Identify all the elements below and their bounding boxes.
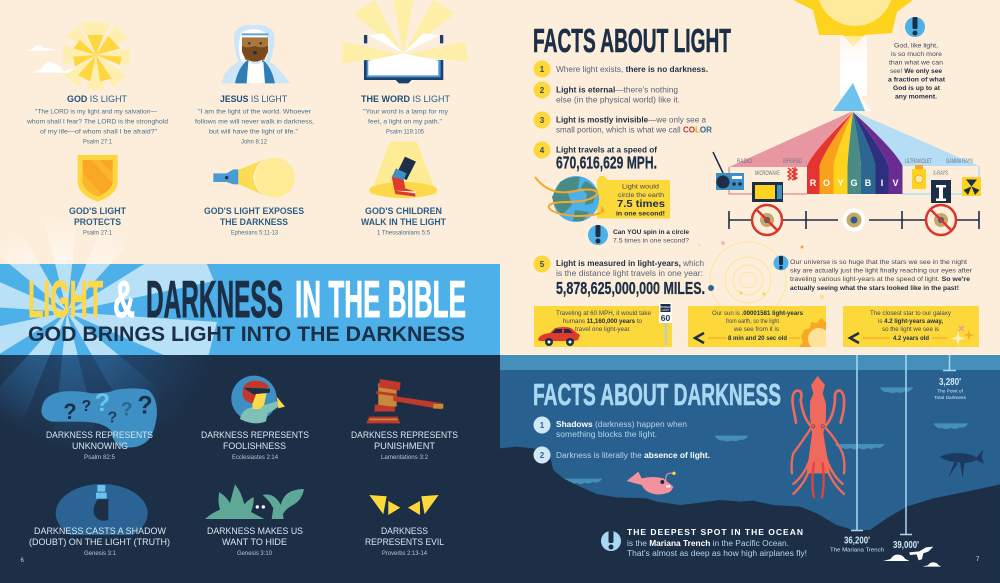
- callout: our sun: from earth, so the light: [726, 318, 779, 325]
- text: punishment: Lamentations 3:2: [381, 455, 429, 461]
- rainbow letters: B: [865, 178, 872, 188]
- icon: jesus: [222, 25, 290, 83]
- icon: car: [538, 327, 580, 346]
- callout: closest star: 4.2 years old: [893, 335, 929, 342]
- spectrum labels: RADIO: [737, 159, 752, 165]
- spectrum labels: X-RAYS: [933, 171, 948, 177]
- fact 3: Light is mostly invisible—we only see a: [556, 116, 707, 124]
- icon: radiation: [962, 177, 981, 196]
- icon: infrared waves: [788, 168, 797, 180]
- text: want to hide: DARKNESS MAKES US: [207, 526, 303, 537]
- chart: visibility ruler: [729, 205, 979, 235]
- rainbow letters: I: [881, 178, 883, 188]
- callout: our universe: traveling various light-years at the speed of light. So we're: [790, 276, 971, 283]
- text: punishment: PUNISHMENT: [374, 441, 435, 452]
- icon: blocked eye left: [752, 205, 782, 235]
- text: the word is light: Psalm 119:105: [386, 130, 425, 136]
- fact 2: [534, 82, 680, 104]
- callout: god like light: [888, 17, 946, 100]
- page number 6: 6: [20, 558, 24, 564]
- title: light and darkness in the bible: &: [113, 271, 135, 329]
- fact 5: 5,878,625,000,000 MILES.: [556, 278, 705, 298]
- callout: circle the earth: Light would: [622, 184, 660, 190]
- icon: speed limit sign: [659, 303, 672, 345]
- text: god is light: GOD IS LIGHT: [67, 94, 127, 105]
- text: god's light exposes the darkness: GOD'S LIGHT EXPOSES: [204, 205, 304, 216]
- chart: electromagnetic spectrum: [713, 83, 981, 203]
- rainbow letters: [810, 178, 899, 188]
- text: god's light exposes the darkness: Ephesians 5:11-13: [231, 230, 279, 236]
- text: god's light exposes the darkness: [204, 205, 304, 236]
- dark fact 1: Shadows (darkness) happen when: [556, 420, 687, 429]
- rainbow letters: O: [823, 178, 830, 188]
- label: 39,000 feet: 39,000': [893, 539, 919, 551]
- text: jesus is light: John 8:12: [241, 140, 268, 146]
- icon: question marks: ?: [107, 409, 117, 426]
- text: casts a shadow: DARKNESS CASTS A SHADOW: [34, 526, 166, 537]
- icon: airplane and clouds: [883, 547, 941, 567]
- callout: our universe: actually seeing what the stars looked like in the past!: [790, 285, 959, 292]
- text: unknowing: UNKNOWING: [72, 441, 128, 452]
- text: god is light: whom shall I fear? The LORD is the stronghold: [26, 118, 168, 126]
- text: god's light exposes the darkness: THE DARKNESS: [220, 216, 288, 227]
- text: the word is light: feet, a light on my path.": [368, 118, 443, 126]
- fact 5: 5: [540, 260, 545, 269]
- text: god's children walk in the light: 1 Thessalonians 5:5: [377, 230, 431, 236]
- text: unknowing: Psalm 82:5: [84, 455, 116, 461]
- blue title band: [0, 264, 500, 355]
- text: god's children walk in the light: GOD'S CHILDREN: [365, 205, 442, 216]
- icon: exclamation: [601, 531, 621, 551]
- callout: god like light: than what we can: [889, 60, 944, 66]
- rainbow letters: V: [892, 178, 899, 188]
- title: light and darkness in the bible: IN THE BIBLE: [295, 271, 466, 329]
- icon: universe rings: [698, 241, 824, 318]
- callout: god like light: God is up to at: [893, 85, 941, 92]
- text: represents evil: REPRESENTS EVIL: [365, 537, 444, 548]
- rainbow letters: Y: [837, 178, 844, 188]
- dark fact 2: Darkness is literally the absence of light.: [556, 451, 710, 460]
- spectrum labels: INFRARED: [783, 159, 802, 165]
- arrow lines: [708, 337, 800, 339]
- icon: sun: [799, 318, 826, 347]
- text: foolishness: Ecclesiastes 2:14: [232, 455, 279, 461]
- text: god's children walk in the light: [361, 205, 446, 236]
- fact 4: 4: [540, 146, 545, 155]
- icon: flashlight: [213, 158, 295, 198]
- fact 5: is the distance light travels in one year:: [556, 269, 703, 278]
- callout: god like light: see! We only see: [890, 68, 943, 75]
- icon: gavel: [366, 379, 443, 423]
- text: represents evil: Proverbs 2:13-14: [382, 551, 428, 557]
- callout: our sun: we see from it is: [733, 326, 779, 333]
- callout: can you spin: Can YOU spin in a circle: [613, 229, 689, 236]
- page number 7: 7: [976, 557, 980, 563]
- icon: question marks: ?: [137, 392, 153, 419]
- text: god's light protects: [69, 205, 126, 236]
- icon: blindfolded head: [231, 376, 285, 423]
- text: represents evil: [365, 526, 444, 557]
- icon: question marks: ?: [63, 399, 77, 424]
- text: foolishness: FOOLISHNESS: [223, 441, 286, 452]
- text: want to hide: WANT TO HIDE: [222, 537, 287, 548]
- fact 3: 3: [540, 116, 545, 125]
- spectrum labels: ULTRAVIOLET: [905, 159, 932, 165]
- callout: our sun: 8 min and 20 sec old: [728, 335, 787, 342]
- ocean floor: [500, 447, 1000, 583]
- icon: microwave: [752, 182, 783, 202]
- callout: closest star: is 4.2 light-years away,: [878, 318, 943, 325]
- icon: speed limit sign: LIMIT: [662, 308, 669, 312]
- dark fact 1: 1: [540, 421, 545, 430]
- text: god's children walk in the light: WALK IN THE LIGHT: [361, 216, 446, 227]
- text: want to hide: [207, 526, 303, 557]
- callout: closest star: [843, 306, 979, 347]
- fact 5: [534, 256, 705, 298]
- callout: deepest spot: is the Mariana Trench in the Pacific Ocean.: [627, 539, 789, 548]
- callout: our sun: [688, 306, 826, 347]
- text: punishment: DARKNESS REPRESENTS: [351, 430, 458, 441]
- text: god is light: Psalm 27:1: [83, 140, 113, 146]
- callout: our universe: Our universe is so huge that the stars we see in the night: [790, 259, 967, 266]
- dark fact 2: 2: [540, 451, 545, 460]
- fact 1: 1: [540, 65, 545, 74]
- text: jesus is light: JESUS IS LIGHT: [220, 94, 287, 105]
- fact 4: 670,616,629 MPH.: [556, 152, 657, 172]
- icon: open book with rays: [342, 0, 468, 83]
- text: god's light protects: GOD'S LIGHT: [69, 205, 126, 216]
- dark fact 1: something blocks the light.: [556, 430, 657, 439]
- callout: god like light: any moment.: [895, 94, 937, 100]
- depth line: point of total darkness: [943, 355, 956, 370]
- icon: question marks: ?: [121, 400, 133, 421]
- icon: question marks: [41, 388, 157, 447]
- callout: closest star: so the light we see is: [882, 326, 939, 333]
- label: 36,200 feet: 36,200': [844, 534, 870, 546]
- callout: traveling at 60 mph: humans 11,160,000 years to: [563, 318, 642, 325]
- text: the word is light: "Your word is a lamp for my: [363, 108, 449, 116]
- icon: question marks: ?: [95, 389, 110, 417]
- text: god is light: [26, 94, 168, 146]
- depth line: airplane height: [900, 355, 912, 534]
- text: punishment: [351, 430, 458, 461]
- subtitle: GOD BRINGS LIGHT INTO THE DARKNESS: [28, 322, 465, 346]
- text: jesus is light: [195, 94, 314, 146]
- spectrum labels: [737, 159, 973, 177]
- callout: can you spin: 7.5 times in one second?: [613, 238, 689, 244]
- icon: stars: [950, 326, 975, 346]
- dark fact 1: [534, 416, 687, 439]
- text: jesus is light: but will have the light of life.": [209, 128, 299, 136]
- icon: sun: [25, 22, 129, 89]
- fact 4: Light travels at a speed of: [556, 146, 657, 154]
- label: 36,200 feet: The Mariana Trench: [830, 548, 884, 554]
- callout: god like light: God, like light,: [894, 42, 938, 50]
- icon: eye chevron: [850, 333, 859, 343]
- icon: speed limit sign: 60: [661, 313, 670, 323]
- label: 3,280 feet: 3,280': [939, 377, 961, 388]
- heading: facts about darkness: FACTS ABOUT DARKNESS: [533, 377, 781, 412]
- callout: can you spin: [588, 225, 689, 245]
- text: the word is light: THE WORD IS LIGHT: [361, 94, 450, 105]
- fact 3: [534, 112, 712, 134]
- fact 1: [534, 60, 708, 78]
- callout: deepest spot: THE DEEPEST SPOT IN THE OCEAN: [627, 527, 803, 537]
- callout: circle the earth: circle the earth: [618, 192, 665, 199]
- icon: exclamation: [774, 256, 788, 270]
- fact 2: Light is eternal —there's nothing: [556, 86, 678, 94]
- fact 3: small portion, which is what we call COLOR: [556, 126, 712, 134]
- icon: sun over spectrum: [793, 0, 913, 96]
- fact 5: Light is measured in light-years, which: [556, 259, 704, 268]
- text: casts a shadow: [29, 526, 170, 557]
- title: light and darkness in the bible: LIGHT: [28, 271, 103, 329]
- icon: blocked eye right: [926, 205, 956, 235]
- text: jesus is light: "I am the light of the world. Whoever: [198, 108, 312, 116]
- label: 36,200 feet: [830, 534, 884, 554]
- text: unknowing: [46, 430, 153, 461]
- callout: our sun: Our sun is .00001581 light-years: [712, 310, 803, 317]
- icon: evil eyes: [369, 495, 439, 515]
- callout: circle the earth: in one second!: [616, 210, 665, 218]
- text: casts a shadow: Genesis 3:1: [84, 551, 117, 557]
- title: light and darkness in the bible: [28, 271, 466, 329]
- panel: light items: [25, 0, 468, 236]
- list: facts 1 to 4: [534, 60, 712, 172]
- title: light and darkness in the bible: DARKNESS: [146, 271, 283, 329]
- fact 2: 2: [540, 86, 545, 95]
- spectrum labels: GAMMA RAYS: [946, 159, 973, 165]
- callout: god like light: a fraction of what: [888, 76, 946, 84]
- icon: exclamation: [905, 17, 925, 37]
- callout: circle the earth: [535, 176, 670, 222]
- icon: bush with eyes: [205, 484, 304, 519]
- label: 3,280 feet: Total Darkness: [934, 395, 966, 401]
- callout: deepest spot: [601, 527, 807, 558]
- icon: anglerfish: [627, 472, 676, 495]
- callout: traveling at 60 mph: travel one light-year.: [575, 326, 631, 333]
- label: 3,280 feet: The Point of: [937, 388, 964, 394]
- icon: shield: [78, 155, 118, 202]
- arrow lines: [863, 337, 947, 339]
- text: the word is light: [361, 94, 450, 136]
- text: god's light protects: PROTECTS: [74, 216, 121, 227]
- ocean waves: [552, 387, 968, 484]
- icon: globe: [535, 176, 605, 222]
- callout: closest star: The closest star to our galaxy: [870, 310, 952, 317]
- icon: visible eye: [842, 208, 866, 232]
- icon: radio: [713, 152, 744, 190]
- callout: our universe: [774, 256, 972, 292]
- rainbow letters: R: [810, 178, 817, 188]
- text: god is light: "The LORD is my light and my salvation—: [35, 108, 157, 116]
- panel: darkness items: [20, 376, 458, 564]
- heading: facts about light: FACTS ABOUT LIGHT: [533, 22, 731, 59]
- icon: speed limit sign: SPEED: [660, 305, 671, 309]
- callout: circle the earth: 7.5 times: [617, 198, 665, 210]
- icon: walking in light: [369, 142, 437, 198]
- text: foolishness: DARKNESS REPRESENTS: [201, 430, 309, 441]
- text: jesus is light: follows me will never walk in darkness,: [195, 118, 314, 126]
- icon: x-ray: [931, 180, 951, 203]
- dark fact 2: [534, 446, 710, 464]
- list: darkness facts: [534, 416, 710, 464]
- text: god's light protects: Psalm 27:1: [83, 230, 113, 236]
- rainbow letters: G: [850, 178, 858, 188]
- callout: deepest spot: That's almost as deep as how high airplanes fly!: [627, 549, 807, 558]
- icon: light bulb shadow: [56, 484, 148, 535]
- rays: cream: [8, 235, 118, 264]
- text: god is light: of my life—of whom shall I be afraid?": [40, 128, 158, 136]
- text: foolishness: [201, 430, 309, 461]
- callout: our universe: sky are actually just the light finally reaching our eyes after: [790, 268, 972, 274]
- icon: sunscreen: [912, 165, 926, 189]
- fact 2: else (in the physical world) like it.: [556, 96, 680, 104]
- icon: exclamation: [588, 225, 608, 245]
- text: represents evil: DARKNESS: [381, 526, 428, 537]
- dark lower left panel: [0, 355, 500, 583]
- text: want to hide: Genesis 3:10: [237, 551, 273, 557]
- panel: ocean: [500, 355, 1000, 583]
- fact 1: Where light exists, there is no darkness.: [556, 65, 708, 74]
- fact 4: [534, 142, 657, 172]
- icon: giant squid: [792, 376, 844, 497]
- callout: traveling at 60 mph: [534, 303, 672, 347]
- text: unknowing: DARKNESS REPRESENTS: [46, 430, 153, 441]
- icon: question marks: ?: [81, 398, 91, 415]
- text: casts a shadow: (DOUBT) ON THE LIGHT (TRUTH): [29, 537, 170, 548]
- spectrum labels: MICROWAVE: [755, 171, 780, 177]
- icon: dark fish: [940, 449, 984, 478]
- callout: god like light: is so much more: [891, 51, 943, 58]
- callout: traveling at 60 mph: Traveling at 60 MPH, it would take: [556, 310, 651, 317]
- depth line: mariana trench: [851, 355, 863, 530]
- icon: eye chevron: [695, 333, 704, 343]
- label: 3,280 feet: [934, 377, 966, 401]
